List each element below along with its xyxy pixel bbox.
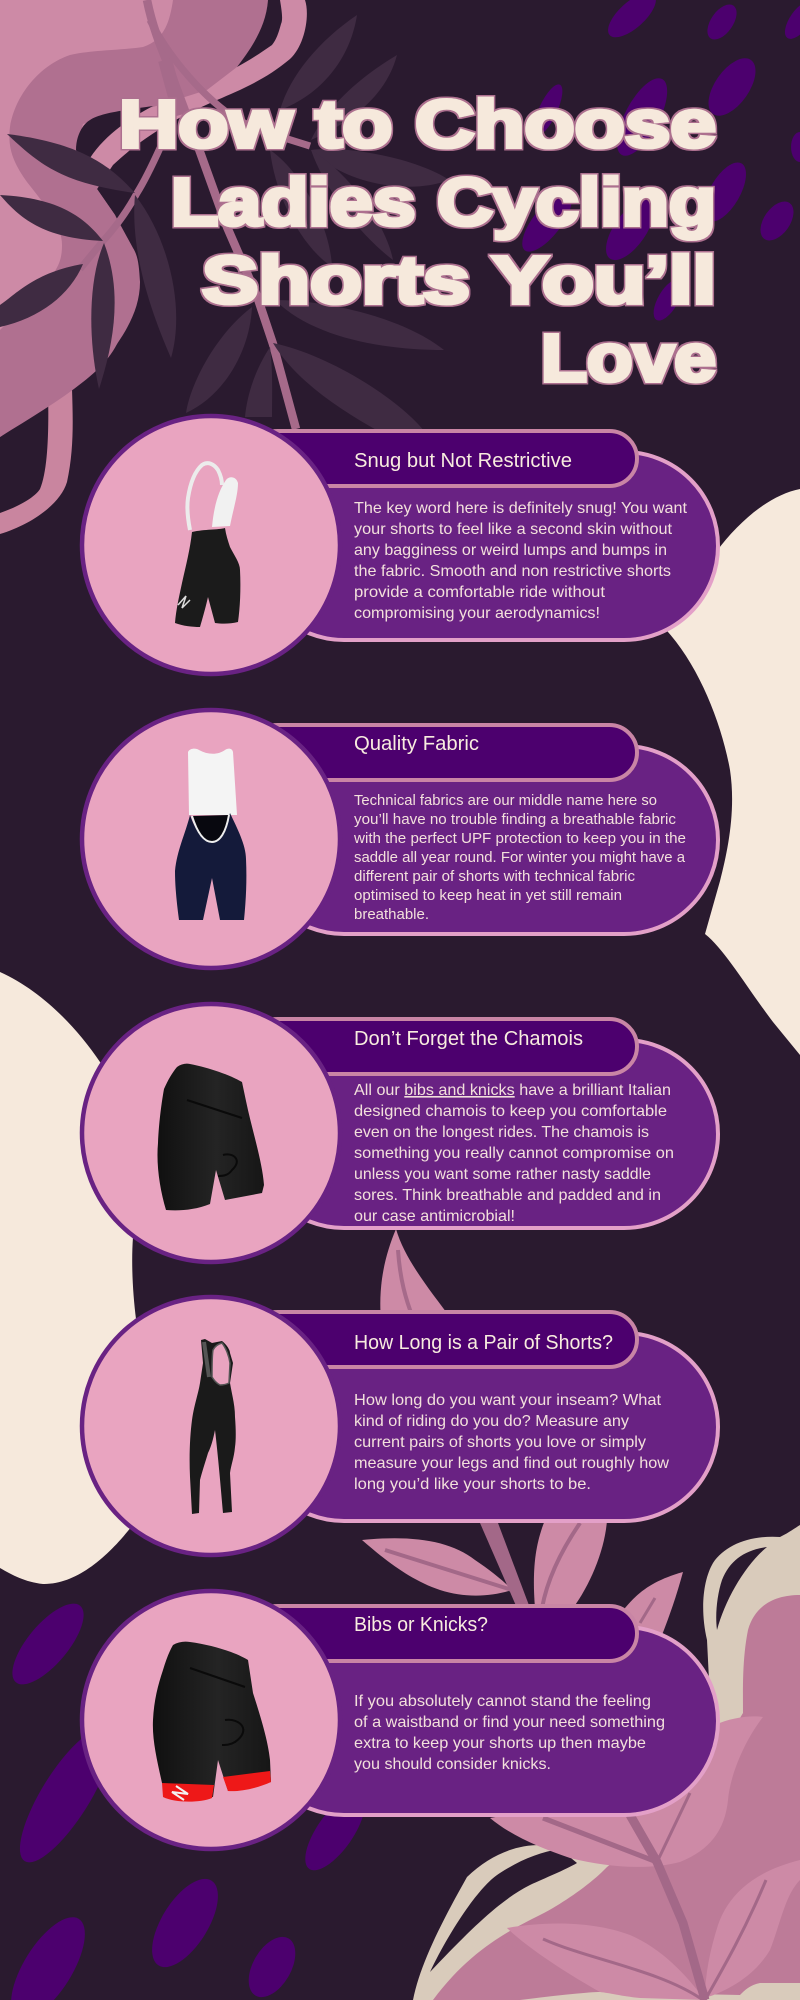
- body text: measure your legs and find out roughly how: [354, 1455, 669, 1472]
- body text: [354, 1392, 669, 1493]
- body text: sores. Think breathable and padded and in: [354, 1187, 661, 1204]
- title: Shorts You’ll: [202, 243, 716, 318]
- product image: black shorts with red cuffs: [153, 1642, 271, 1802]
- body text: something you really cannot compromise on: [354, 1145, 674, 1162]
- body text: compromising your aerodynamics!: [354, 605, 600, 622]
- body text: current pairs of shorts you love or simply: [354, 1434, 646, 1451]
- body text: saddle all year round. For winter you might have a: [354, 850, 686, 866]
- heading: Don’t Forget the Chamois: [354, 1028, 583, 1050]
- panel: don't forget the chamois: [82, 1004, 718, 1262]
- leaf between panels: [380, 1229, 452, 1320]
- title: Love: [541, 321, 716, 396]
- title: [119, 87, 716, 396]
- body text: [354, 500, 688, 622]
- body text: long you’d like your shorts to be.: [354, 1476, 591, 1493]
- body text: even on the longest rides. The chamois is: [354, 1124, 649, 1141]
- body text: you’ll have no trouble finding a breathable fabric: [354, 812, 676, 828]
- decoration: top-left organic shapes and leaves: [0, 0, 310, 534]
- body text: Technical fabrics are our middle name here so: [354, 793, 657, 809]
- decoration: bottom-right plant: [362, 1520, 800, 2000]
- body text: our case antimicrobial!: [354, 1208, 515, 1225]
- decorative purple dashes bottom left: [0, 1593, 376, 2000]
- body text: If you absolutely cannot stand the feeling: [354, 1693, 651, 1710]
- body text: you should consider knicks.: [354, 1756, 551, 1773]
- panel: snug but not restrictive: [82, 416, 718, 674]
- blob: cream left: [0, 972, 150, 1584]
- body text: The key word here is definitely snug! You want: [354, 500, 688, 517]
- body text: different pair of shorts with technical fabric: [354, 869, 635, 885]
- panel: quality fabric: [82, 710, 718, 968]
- body text: any bagginess or weird lumps and bumps in: [354, 542, 667, 559]
- product image: navy bib shorts: [175, 749, 246, 920]
- heading: Quality Fabric: [354, 733, 479, 755]
- blob: cream right: [640, 489, 800, 1055]
- panel: how long is a pair of shorts: [82, 1297, 718, 1555]
- product image: black bib shorts: [175, 463, 240, 627]
- decorative purple dashes top right: [514, 0, 800, 325]
- title: How to Choose: [119, 87, 716, 162]
- body text: optimised to keep heat in yet still remain: [354, 888, 622, 904]
- panel: bibs or knicks: [82, 1591, 718, 1849]
- product image: black bib tights: [190, 1339, 236, 1514]
- body text: your shorts to feel like a second skin without: [354, 521, 673, 538]
- body text: kind of riding do you do? Measure any: [354, 1413, 629, 1430]
- body text: the fabric. Smooth and non restrictive shorts: [354, 563, 671, 580]
- body text: All our bibs and knicks have a brilliant Italian: [354, 1082, 671, 1099]
- title: Ladies Cycling: [171, 165, 716, 240]
- body text: How long do you want your inseam? What: [354, 1392, 662, 1409]
- body text: with the perfect UPF protection to keep you in the: [353, 831, 686, 847]
- body text: designed chamois to keep you comfortable: [354, 1103, 667, 1120]
- body text: [354, 1082, 674, 1225]
- body text: extra to keep your shorts up then maybe: [354, 1735, 646, 1752]
- body text: [354, 1693, 665, 1773]
- product image: black shorts with chamois: [157, 1064, 264, 1210]
- body text: [353, 793, 686, 923]
- body text: breathable.: [354, 907, 429, 923]
- body text: unless you want some rather nasty saddle: [354, 1166, 651, 1183]
- heading: Bibs or Knicks?: [354, 1614, 488, 1636]
- heading: How Long is a Pair of Shorts?: [354, 1332, 613, 1354]
- body text: provide a comfortable ride without: [354, 584, 606, 601]
- heading: Snug but Not Restrictive: [354, 450, 572, 472]
- body text: of a waistband or find your need something: [354, 1714, 665, 1731]
- decoration: faint leaves behind the title: [186, 15, 449, 432]
